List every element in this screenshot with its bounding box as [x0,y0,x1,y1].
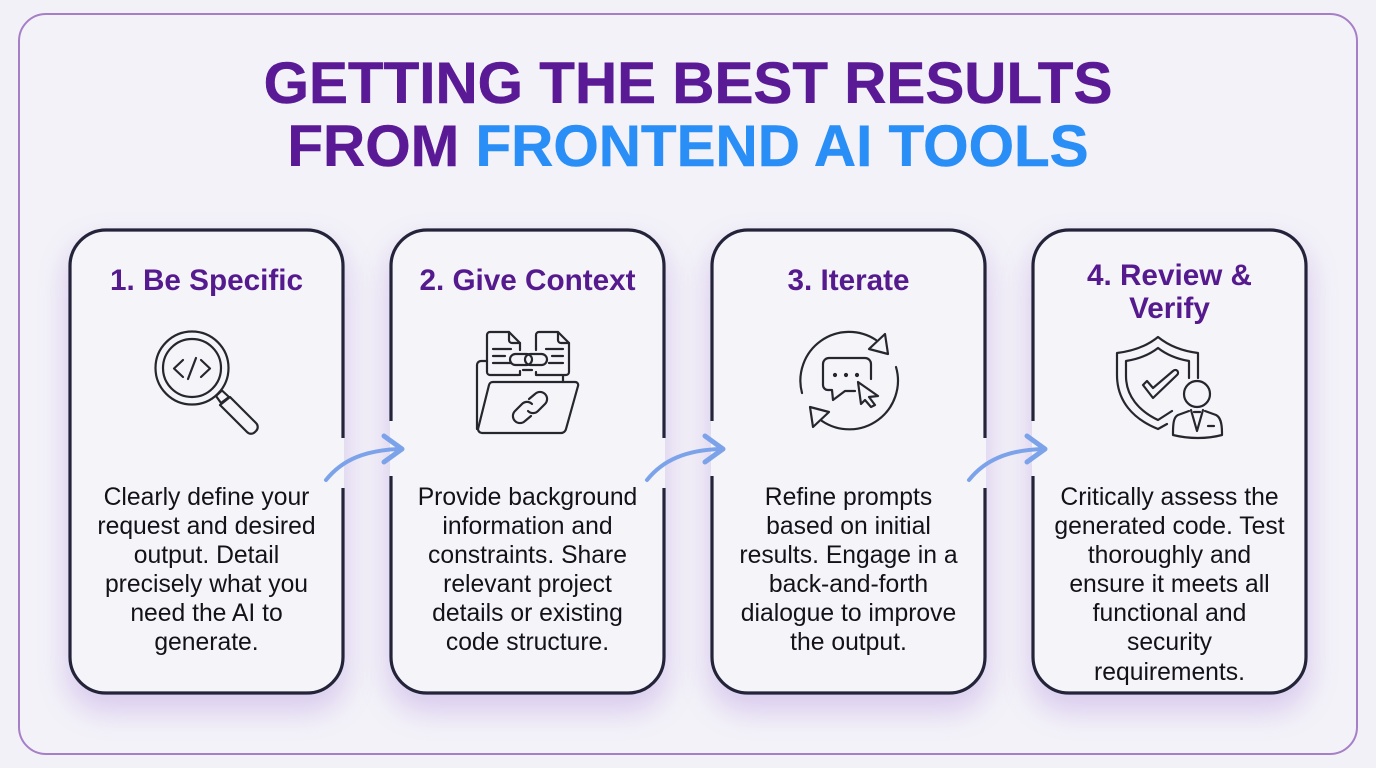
icon: magnifier with code [154,330,259,435]
title: GETTING THE BEST RESULTS [264,51,1112,116]
panel: step 4 review and verify [1032,229,1307,694]
text: step 1 [97,484,316,656]
text: step 3: dialogue to improve [741,600,956,627]
text: step 2: constraints. Share [428,542,627,569]
text: step 4: generated code. Test [1054,513,1285,540]
text: step 1: request and desired [97,513,316,540]
card outline 2 [389,228,666,695]
heading: step 2: 2. Give Context [419,264,636,297]
text: step 1: precisely what you [105,571,308,598]
text: step 1: generate. [154,629,259,656]
text: step 3: results. Engage in a [739,542,958,569]
text: step 2: relevant project [443,571,612,598]
card outline 3 [710,228,987,695]
card outline 4 [1031,228,1308,695]
text: step 2: details or existing [432,600,623,627]
text: step 3: Refine prompts [765,484,932,511]
heading: step 3: 3. Iterate [787,264,910,297]
panel: step 3 iterate [711,229,986,694]
title [264,51,1112,178]
icon: iteration cycle with chat bubble [799,330,900,430]
text: step 4 [1054,484,1285,686]
text: step 3 [739,484,958,656]
text: step 2: Provide background [418,484,637,511]
title: FROM FRONTEND AI TOOLS [287,114,1089,178]
text: step 2 [418,484,637,656]
text: step 4: requirements. [1094,659,1245,686]
card outline 1 [68,228,345,695]
text: step 3: back-and-forth [769,571,928,598]
text: step 4: thoroughly and [1088,542,1251,569]
panel: step 2 give context [390,229,665,694]
text: step 1: need the AI to [130,600,283,627]
text: step 2: code structure. [446,629,609,656]
heading: step 1: 1. Be Specific [110,264,303,297]
text: step 3: the output. [790,629,907,656]
text: step 4: functional and [1093,600,1246,627]
icon: shield with check and person [1116,336,1224,440]
text: step 4: security [1127,629,1212,656]
heading: step 4 [1087,259,1252,325]
text: step 1: Clearly define your [104,484,309,511]
panel: step 1 be specific [69,229,344,694]
text: step 1: output. Detail [134,542,279,569]
icon: folder with linked documents [476,330,580,434]
text: step 4: Critically assess the [1060,484,1279,511]
text: step 3: based on initial [766,513,931,540]
text: step 2: information and [442,513,613,540]
heading: step 4: 4. Review & [1087,259,1252,292]
heading: step 4: Verify [1129,292,1210,325]
text: step 4: ensure it meets all [1069,571,1270,598]
